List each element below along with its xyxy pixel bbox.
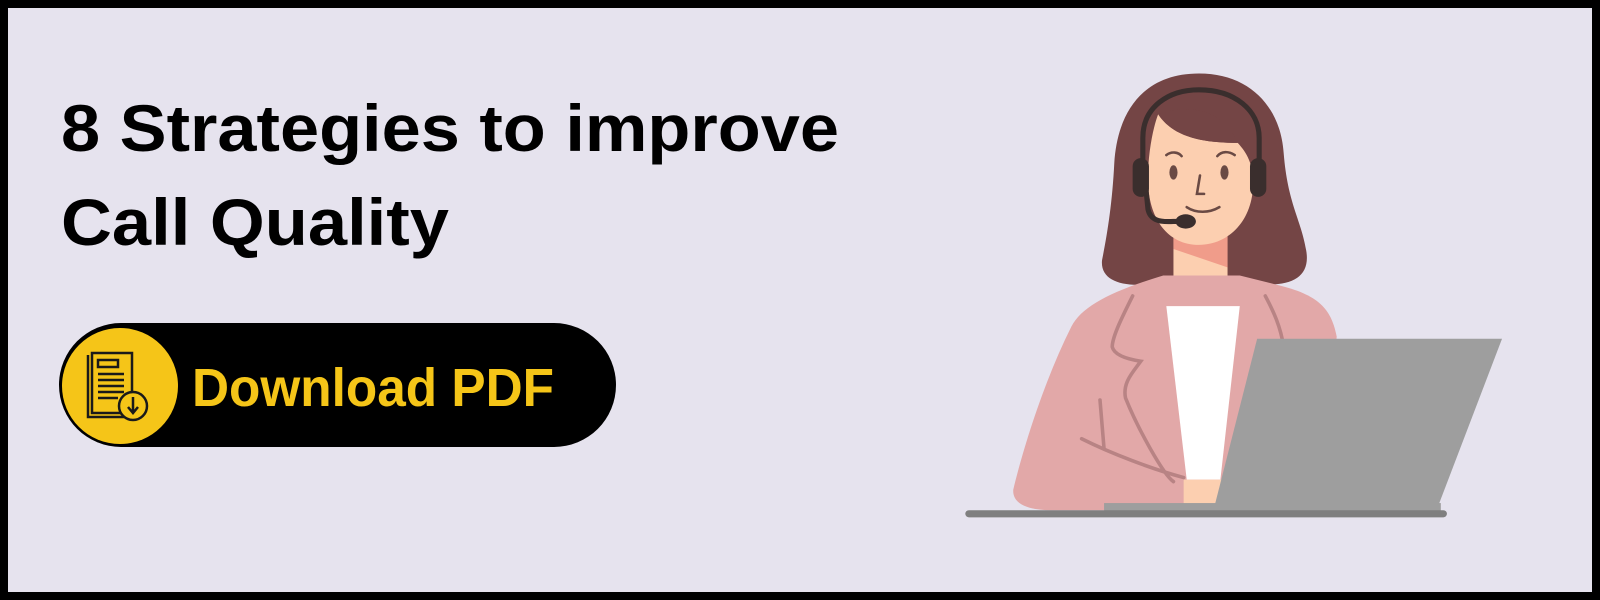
hands: [1184, 480, 1224, 505]
jacket: [1013, 276, 1337, 510]
table: [965, 510, 1447, 517]
laptop: [1214, 339, 1502, 507]
button: download pdf: [59, 323, 616, 447]
jacket lines: [1082, 296, 1284, 482]
button label: Download PDF: [192, 358, 554, 418]
illustration: agent at laptop: [965, 73, 1502, 517]
shirt: [1166, 306, 1240, 480]
title: Call Quality: [61, 185, 449, 259]
eyes, brows, nose, smile: [1169, 165, 1229, 180]
neck: [1173, 235, 1228, 306]
headset: [1143, 90, 1259, 222]
title: [61, 91, 839, 259]
icon: document download: [62, 328, 178, 444]
hair: [1102, 73, 1307, 285]
title: 8 Strategies to improve: [61, 91, 839, 165]
face: [1148, 114, 1253, 245]
